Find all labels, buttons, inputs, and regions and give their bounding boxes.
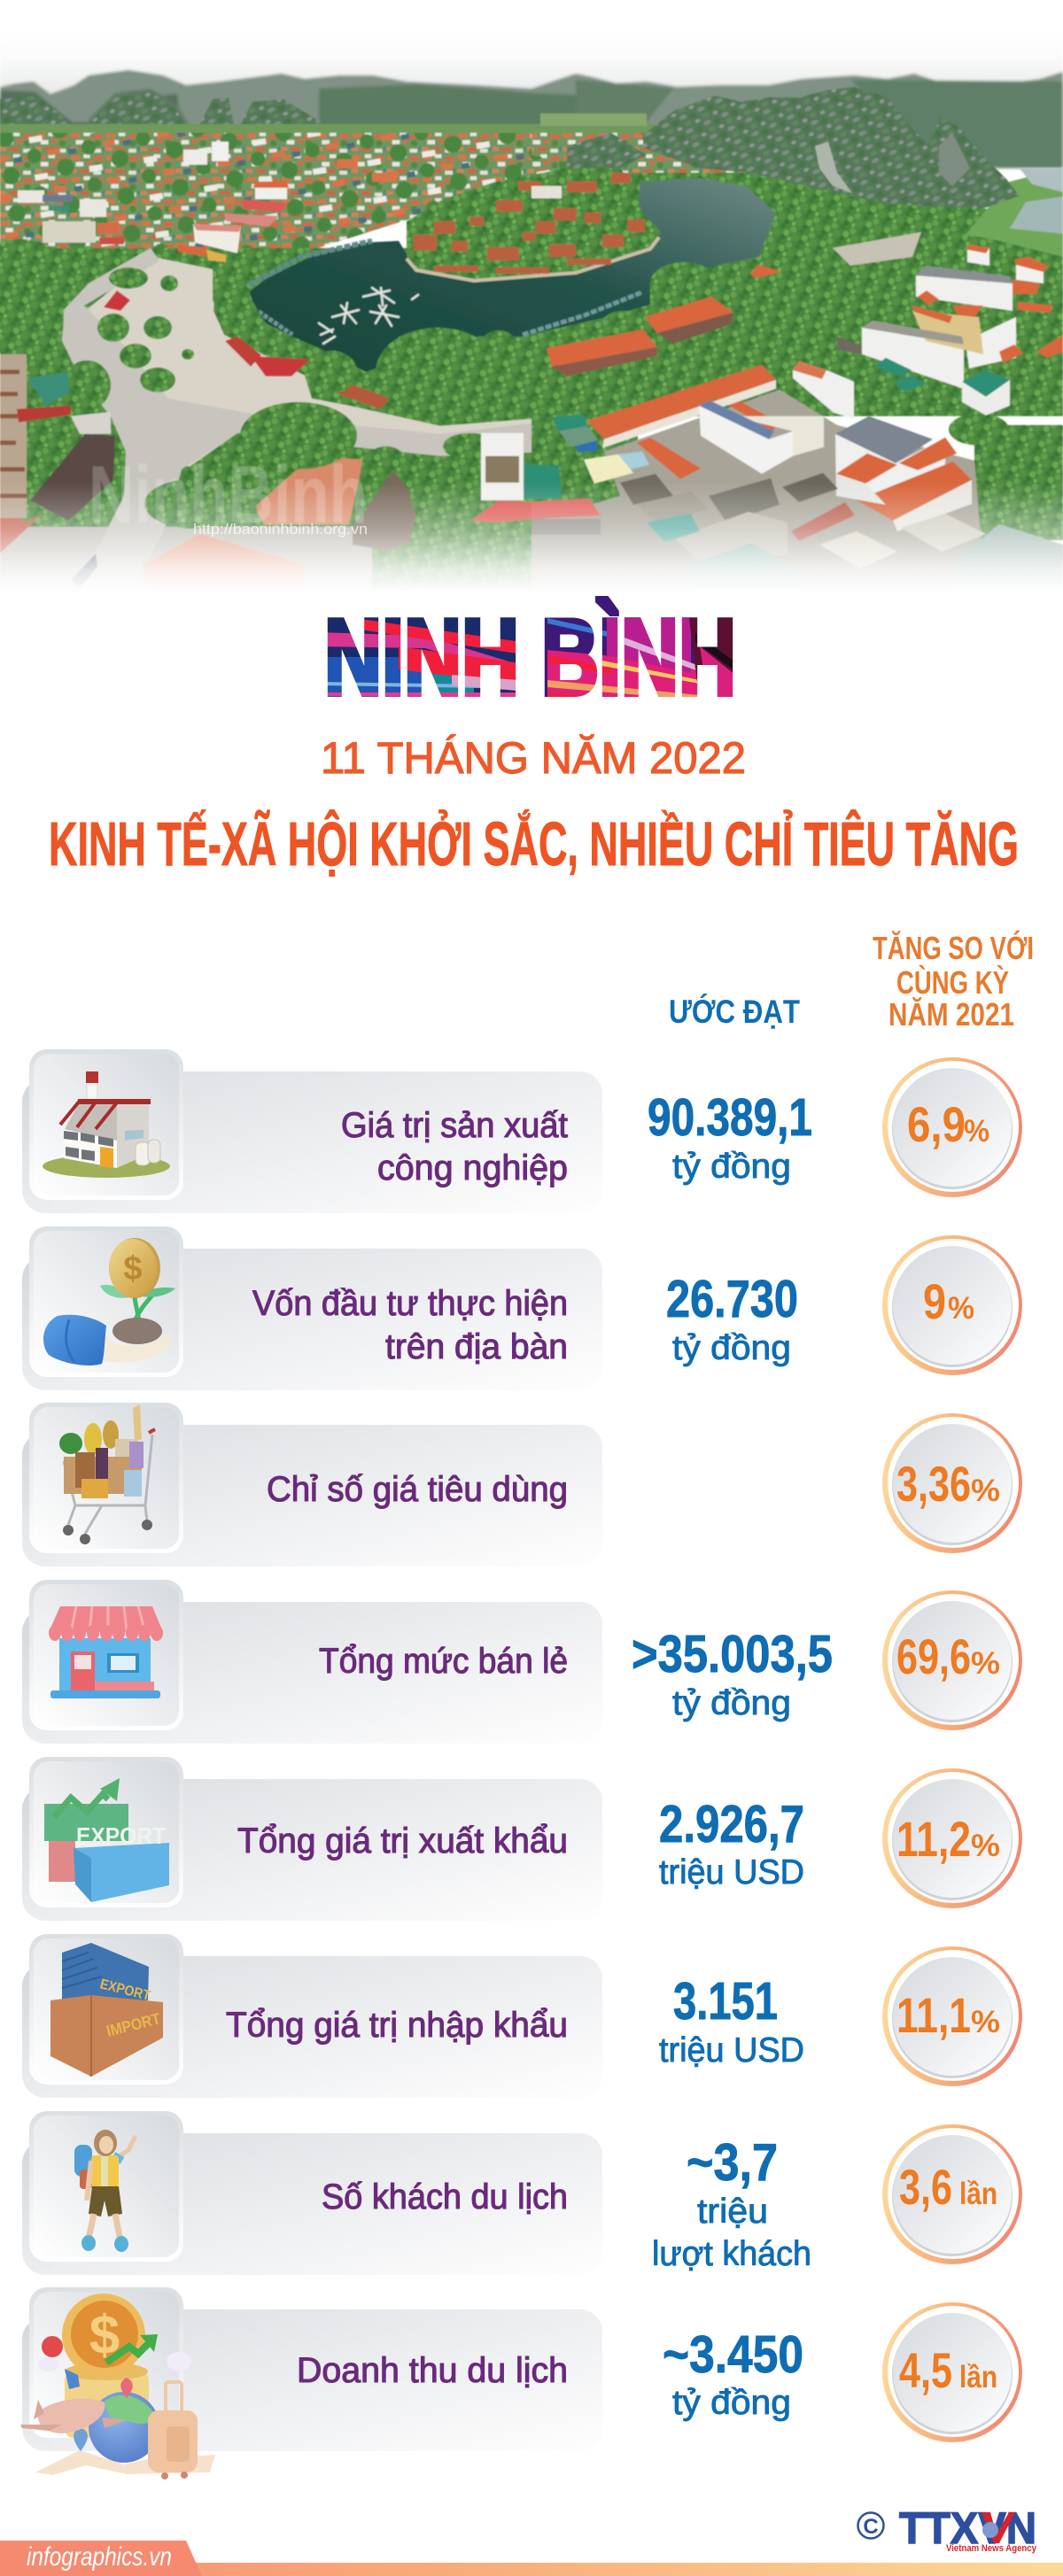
- increase badge: [882, 1768, 1022, 1908]
- lower right built-up base: [532, 390, 983, 607]
- row 8: tourism revenue: [20, 2287, 1022, 2479]
- karst hills: [200, 97, 234, 124]
- orange ground: [254, 456, 362, 524]
- icon: import containers: [50, 1943, 163, 2077]
- right wetland field: [966, 168, 1063, 257]
- increase badge: [882, 1413, 1022, 1553]
- cream building: [912, 311, 983, 354]
- boats: [319, 288, 418, 344]
- orange roofs: [547, 244, 1063, 521]
- increase badge: %: [971, 2005, 1000, 2039]
- value: tỷ đồng: [672, 1148, 791, 1186]
- increase badge: [882, 2124, 1022, 2264]
- icon: export containers: [44, 1778, 169, 1902]
- value: triệu USD: [659, 1853, 804, 1891]
- value: triệu: [697, 2193, 768, 2231]
- icon: shopping cart: [59, 1404, 155, 1544]
- row 5: exports: [22, 1757, 1022, 1921]
- teal roofs: [532, 358, 1010, 499]
- value: [659, 1972, 804, 2069]
- logo: TTXVN: Vietnam News Agency: [946, 2543, 1037, 2554]
- increase badge: lần: [959, 2360, 997, 2394]
- left buildings and roofs: [0, 224, 390, 553]
- flat grey roofs: [674, 512, 788, 561]
- value: [632, 1625, 833, 1722]
- increase badge: 9: [923, 1273, 946, 1329]
- fields band: [0, 123, 656, 134]
- big karst mountain: [643, 87, 1020, 209]
- label: công nghiệp: [377, 1149, 568, 1187]
- label: Doanh thu du lịch: [297, 2351, 568, 2390]
- logo: TTXVN: C: [863, 2515, 879, 2539]
- row 1: industrial production: [22, 1049, 1022, 1213]
- value: >35.003,5: [632, 1625, 833, 1683]
- icon: shop: [49, 1606, 163, 1698]
- photo watermark: NinhBinh: [89, 450, 368, 540]
- left trees: [0, 238, 195, 406]
- value: tỷ đồng: [672, 1329, 791, 1367]
- increase badge: 11,1: [896, 1987, 971, 2043]
- value: tỷ đồng: [672, 1684, 791, 1722]
- lower road ground: [0, 526, 372, 577]
- grey-blue roofs: [699, 400, 774, 439]
- icon: factory: [43, 1071, 170, 1178]
- value: ~3,7: [687, 2133, 778, 2192]
- icon: hand with coin plant: [43, 1238, 175, 1365]
- column header: increase: NĂM 2021: [888, 996, 1014, 1033]
- moored boats: [249, 241, 372, 285]
- increase badge: 6,9: [907, 1096, 966, 1152]
- bottom fade of photo: [0, 483, 1063, 599]
- town base: [0, 131, 562, 249]
- value: [652, 2133, 811, 2273]
- island roofs: [414, 173, 645, 274]
- cream roof: [584, 454, 633, 483]
- increase badge: [882, 1946, 1022, 2086]
- label: Chỉ số giá tiêu dùng: [267, 1470, 568, 1509]
- lower left building details: [481, 433, 524, 500]
- wetland water: [1020, 168, 1063, 192]
- flat dark roofs: [782, 473, 838, 502]
- value: ~3.450: [663, 2325, 803, 2384]
- increase badge: [882, 1235, 1022, 1375]
- value: 3.151: [673, 1972, 778, 2031]
- photo url: http://baoninhbinh.org.vn: [193, 521, 368, 538]
- left ground: [0, 248, 638, 533]
- white buildings: [793, 244, 1044, 496]
- increase badge: %: [971, 1646, 1000, 1681]
- central trees: [144, 328, 532, 593]
- footer site name: infographics.vn: [27, 2542, 172, 2572]
- value: triệu USD: [659, 2031, 804, 2069]
- value: [659, 1795, 804, 1891]
- right trees: [519, 262, 1063, 577]
- lower teal roofs: [687, 543, 803, 607]
- value: 2.926,7: [659, 1795, 804, 1853]
- increase badge: 4,5: [899, 2342, 952, 2398]
- icon: hand with coin plant: $: [123, 1250, 143, 1288]
- value: [648, 1088, 812, 1186]
- distinct town buildings: [16, 140, 398, 245]
- icon: tourism collage: [20, 2294, 215, 2479]
- label: Vốn đầu tư thực hiện: [252, 1284, 568, 1323]
- right foliage: [630, 172, 1063, 418]
- label: Số khách du lịch: [322, 2178, 568, 2216]
- increase badge: %: [971, 1474, 1000, 1508]
- lake: [247, 178, 776, 372]
- value: 90.389,1: [648, 1088, 812, 1147]
- value: [666, 1270, 798, 1367]
- label: [252, 1284, 568, 1366]
- row 4: retail sales: [22, 1580, 1022, 1744]
- label: Tổng giá trị nhập khẩu: [226, 2006, 568, 2045]
- building walls: [602, 380, 776, 448]
- bare ground: [833, 232, 921, 266]
- increase badge: %: [948, 1291, 974, 1326]
- increase badge: 11,2: [896, 1811, 971, 1867]
- title: Ninh Bình: NINH BÌNH: [324, 597, 736, 717]
- value: 26.730: [666, 1270, 798, 1328]
- icon: export containers: EXPORT: [76, 1822, 166, 1849]
- increase badge: [882, 1057, 1022, 1197]
- footer tab: [0, 2541, 202, 2576]
- subtitle: period: 11 THÁNG NĂM 2022: [321, 733, 746, 783]
- increase badge: 3,36: [896, 1456, 971, 1512]
- mountains and sky: [0, 62, 1063, 170]
- road: [61, 247, 532, 540]
- column header: estimate: ƯỚC ĐẠT: [669, 993, 800, 1030]
- island in the lake: [407, 168, 661, 281]
- pink roof house: [532, 499, 601, 519]
- column header: increase: [873, 929, 1034, 1033]
- row 2: investment capital: [22, 1226, 1022, 1390]
- brown roof: [353, 470, 419, 554]
- label: trên địa bàn: [385, 1327, 568, 1366]
- increase badge: [882, 1590, 1022, 1730]
- increase badge: %: [971, 1829, 1000, 1863]
- plaza: [75, 257, 532, 467]
- tree row along lake: [212, 268, 292, 337]
- label: Giá trị sản xuất: [341, 1106, 568, 1145]
- increase badge: [882, 2302, 1022, 2442]
- row 7: tourists: [22, 2111, 1022, 2275]
- value: tỷ đồng: [672, 2384, 791, 2422]
- footer band: [0, 2563, 1063, 2576]
- label: Tổng giá trị xuất khẩu: [237, 1822, 568, 1860]
- label: Tổng mức bán lẻ: [319, 1642, 568, 1681]
- photo: aerial view of Ninh Bình lake and town: [0, 27, 1063, 607]
- value: lượt khách: [652, 2235, 811, 2273]
- value: [663, 2325, 803, 2422]
- increase badge: %: [964, 1114, 989, 1149]
- increase badge: lần: [959, 2177, 997, 2211]
- increase badge: 69,6: [896, 1628, 971, 1684]
- label: [341, 1106, 568, 1187]
- logo: TTXVN: TTXVN: [899, 2503, 1036, 2553]
- icon: traveller: [74, 2130, 136, 2252]
- row 3: consumer price index: [22, 1403, 1022, 1566]
- row 6: imports: [22, 1934, 1022, 2098]
- icon: import containers: EXPORT: [98, 1976, 152, 2004]
- icon: tourism collage: $: [89, 2305, 120, 2366]
- column header: increase: CÙNG KỲ: [896, 963, 1009, 1001]
- increase badge: 3,6: [899, 2159, 952, 2215]
- red brown roof: [791, 502, 855, 541]
- icon: import containers: IMPORT: [105, 2009, 162, 2040]
